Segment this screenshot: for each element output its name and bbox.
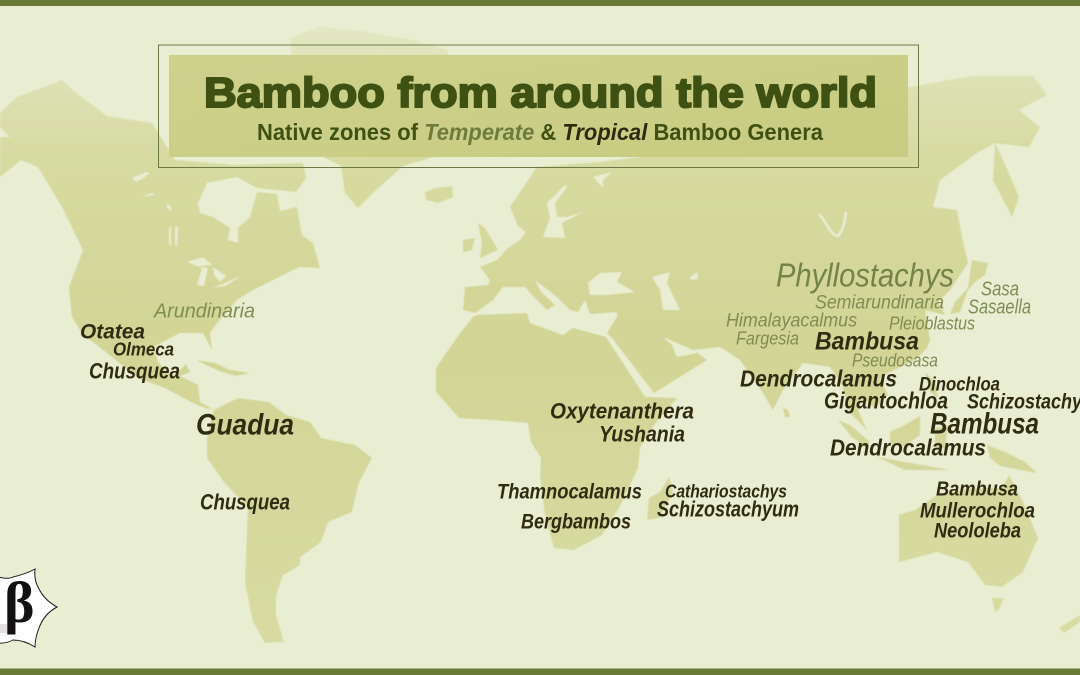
landmass: Japan	[950, 260, 988, 314]
water: Black Sea	[588, 272, 635, 295]
label: Yushania	[599, 422, 685, 447]
water: Great Lakes	[187, 257, 243, 288]
water: Aral Sea	[690, 272, 698, 280]
landmass: British Isles	[463, 223, 498, 258]
label: Chusquea	[200, 490, 290, 515]
label: Dendrocalamus	[830, 435, 986, 461]
label: Pseudosasa	[852, 351, 938, 371]
label: Chusquea	[89, 359, 180, 384]
label: Arundinaria	[153, 301, 255, 323]
label: Cathariostachys	[665, 482, 787, 502]
genus labels: Africa	[497, 399, 799, 534]
logo badge	[0, 569, 57, 647]
label: Otatea	[80, 321, 145, 344]
logo glyph: β	[4, 570, 35, 635]
landmass: Australia	[899, 475, 1038, 587]
landmass: South America	[207, 398, 372, 643]
landmass: Madagascar	[647, 477, 673, 520]
title panel	[158, 45, 918, 168]
title frame	[158, 45, 918, 168]
bottom border bar	[0, 668, 1080, 675]
water: Persian Gulf	[663, 337, 697, 357]
genus labels: Asia tropical	[740, 328, 1080, 461]
genus labels: Asia temperate	[726, 257, 1031, 371]
label: Sasaella	[968, 297, 1031, 319]
label: Dendrocalamus	[740, 366, 897, 392]
label: Dinochloa	[919, 375, 1000, 396]
label: Bambusa	[936, 479, 1018, 501]
label: Thamnocalamus	[497, 481, 642, 504]
landmass: Java and lesser islands	[877, 457, 950, 470]
genus labels: Australia	[920, 479, 1035, 543]
label: Pleioblastus	[889, 314, 975, 334]
label: Bambusa	[815, 328, 919, 356]
label: Bambusa	[930, 408, 1039, 441]
landmass: New Guinea	[987, 445, 1037, 473]
subheading: Native zones of Temperate & Tropical Bamboo Genera	[257, 119, 823, 145]
label: Oxytenanthera	[550, 399, 694, 424]
landmass: Sulawesi and Philippines	[925, 372, 948, 448]
title background	[169, 55, 908, 157]
water: Baltic Sea	[543, 185, 583, 238]
landmass: Africa	[436, 313, 677, 550]
label: Fargesia	[736, 329, 799, 349]
logo lotus outline	[0, 569, 57, 647]
water: White Sea	[593, 172, 612, 188]
label: Gigantochloa	[824, 388, 948, 414]
label: Semiarundinaria	[815, 293, 944, 314]
water: Lake Baikal	[819, 212, 846, 236]
label: Phyllostachys	[776, 257, 954, 294]
logo seal	[0, 624, 7, 633]
label: Himalayacalmus	[726, 311, 857, 332]
label: Mullerochloa	[920, 500, 1035, 523]
landmass: Iceland	[425, 186, 453, 203]
label: Sasa	[981, 279, 1019, 301]
landmass: Greenland	[290, 27, 448, 208]
label: Guadua	[196, 409, 294, 442]
landmass: New Zealand	[1059, 615, 1080, 633]
label: Schizostachyum	[657, 497, 799, 522]
landmass: Eurasia	[463, 76, 1047, 430]
label: Neololeba	[934, 520, 1021, 543]
landmass: Cuba and Caribbean	[197, 360, 250, 376]
label: Olmeca	[113, 340, 174, 360]
landmass: North and Central America	[0, 80, 320, 410]
landmass: Borneo	[890, 416, 920, 446]
landmass: Sri Lanka	[783, 408, 790, 417]
water: Hudson Bay	[198, 177, 297, 243]
landmass: Tasmania	[992, 598, 1004, 612]
top border bar	[0, 0, 1080, 6]
label: Bergbambos	[521, 511, 631, 534]
landmass: Sumatra	[838, 420, 870, 448]
genus labels: Americas	[80, 301, 294, 515]
water: Northern Canadian lakes	[132, 172, 178, 246]
landmass: Sakhalin	[993, 143, 1019, 217]
water: Caspian Sea	[652, 272, 680, 310]
main heading: Bamboo from around the world	[204, 69, 877, 116]
